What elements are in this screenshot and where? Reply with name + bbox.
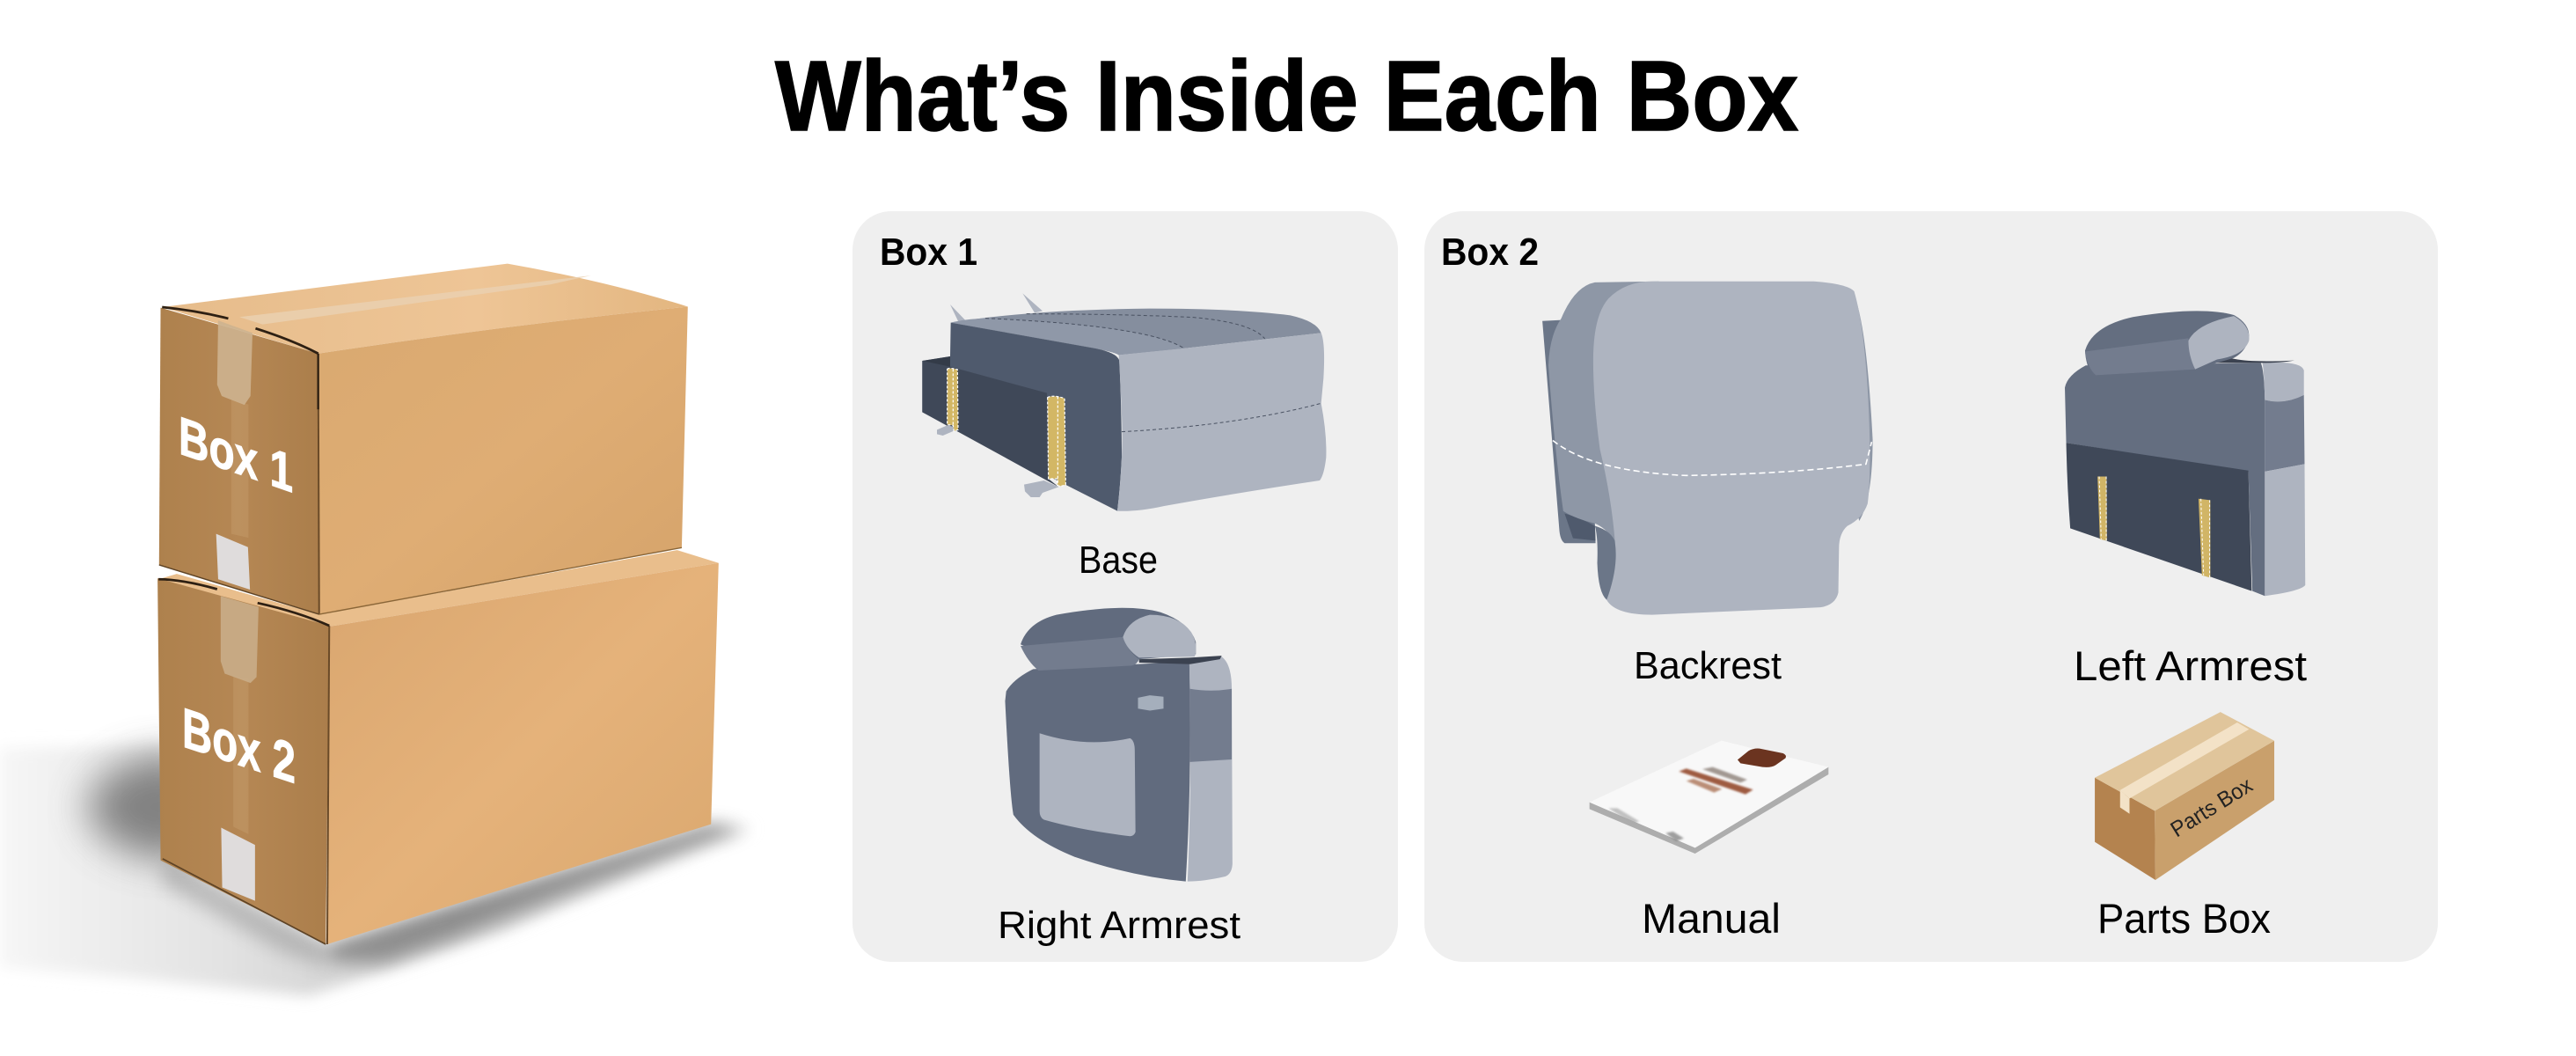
label: Parts Box: Parts Box: [2097, 895, 2271, 942]
label: Left Armrest: Left Armrest: [2074, 642, 2307, 689]
illustration: manual: [1590, 741, 1828, 854]
heading: Box 1: Box 1: [880, 231, 977, 274]
heading: Box 2: Box 2: [1441, 231, 1539, 274]
lower box: Box 2: [157, 550, 719, 944]
upper box: Box 1: [159, 264, 688, 614]
illustration: parts box: [2095, 712, 2274, 880]
illustration: base: [922, 293, 1326, 511]
label on carton: Parts Box: Parts Box: [2166, 773, 2258, 842]
label: Box 1 on carton: Box 1: [179, 406, 293, 504]
label: Manual: Manual: [1642, 895, 1781, 942]
title: What’s Inside Each Box: [775, 40, 1798, 151]
stacked shipping boxes photo: [0, 264, 752, 996]
label: Backrest: Backrest: [1634, 644, 1782, 687]
label: Right Armrest: Right Armrest: [998, 904, 1240, 947]
illustration: right armrest: [1005, 608, 1233, 882]
illustration: left armrest: [2065, 311, 2305, 596]
label: Box 2 on carton: Box 2: [182, 696, 296, 796]
label: Base: Base: [1079, 539, 1158, 582]
illustration: backrest: [1542, 282, 1873, 615]
panel: Box 2: [1424, 211, 2438, 962]
floor shadow: [0, 745, 752, 996]
panel: Box 1: [853, 211, 1398, 962]
